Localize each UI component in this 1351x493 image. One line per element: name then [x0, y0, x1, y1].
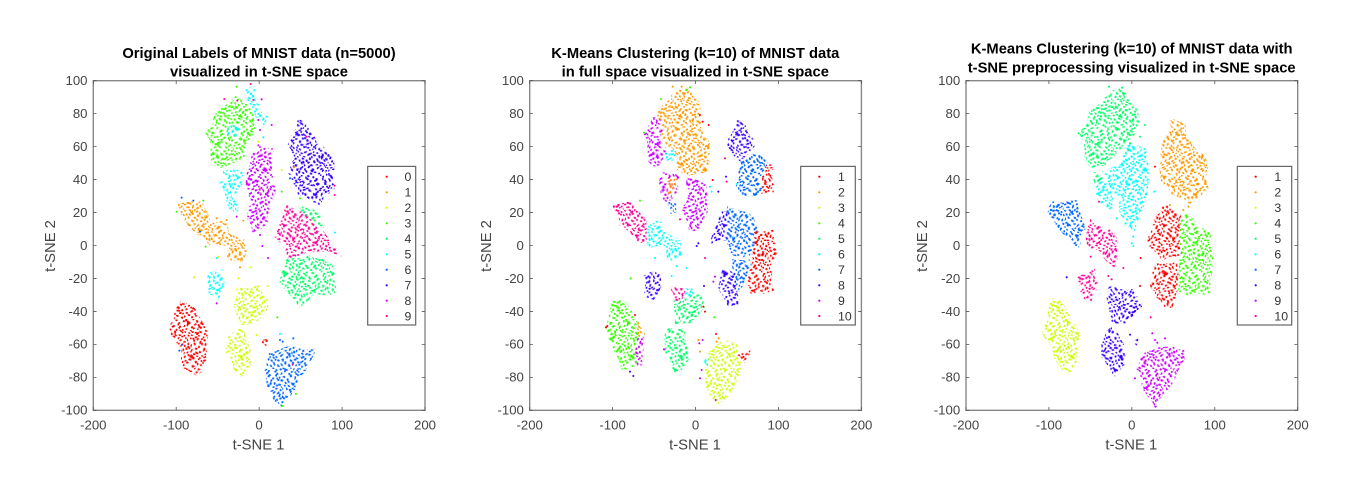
x tick labels: 0	[1128, 418, 1135, 432]
legend: clusters 1 to 10	[801, 166, 855, 325]
x tick labels	[953, 418, 1309, 432]
y tick labels: 20	[946, 205, 960, 220]
legend: clusters 1 to 10: 8	[838, 278, 845, 292]
y tick labels: 40	[73, 172, 88, 187]
panel: k-means with t-SNE preprocessing	[915, 42, 1309, 454]
y tick labels: 20	[509, 205, 524, 220]
y tick labels: -80	[941, 370, 960, 385]
legend: clusters 1 to 10: 10	[1274, 309, 1288, 323]
legend: digits 0 to 9: 5	[404, 248, 412, 262]
y tick labels: -100	[934, 403, 960, 418]
y tick labels: -80	[68, 370, 88, 385]
scatter plot: original labels	[168, 84, 342, 407]
y tick labels: 0	[80, 238, 88, 253]
y tick labels: 60	[73, 139, 88, 154]
scatter plot: k-means with t-SNE preprocessing	[1042, 85, 1215, 407]
y tick labels: -40	[505, 304, 524, 319]
x tick labels: 100	[331, 418, 353, 432]
legend: clusters 1 to 10: 3	[838, 201, 845, 215]
y tick labels	[61, 73, 88, 418]
legend: clusters 1 to 10: 4	[838, 216, 845, 230]
legend: digits 0 to 9	[368, 166, 416, 325]
y tick labels	[497, 73, 524, 418]
x tick labels	[516, 418, 872, 432]
x tick labels: 200	[1287, 418, 1309, 432]
y tick labels: 100	[65, 73, 88, 88]
legend: digits 0 to 9: 6	[404, 263, 412, 277]
x tick labels: 100	[1204, 418, 1226, 432]
x tick labels: 0	[692, 418, 699, 432]
axes frame and ticks: k-means in full space	[530, 81, 861, 410]
x axis label: t-SNE 1	[669, 438, 721, 454]
legend: clusters 1 to 10: 1	[1274, 170, 1281, 184]
axes frame and ticks: original labels	[93, 81, 425, 410]
y tick labels: -40	[68, 304, 88, 319]
legend: clusters 1 to 10: 1	[838, 170, 845, 184]
y tick labels	[934, 73, 960, 418]
legend: clusters 1 to 10: 6	[1274, 248, 1281, 262]
legend: digits 0 to 9: 9	[404, 309, 412, 323]
title: k-means in full space: K-Means Clustering (k=10) of MNIST data	[551, 46, 840, 62]
y tick labels: -20	[941, 271, 960, 286]
legend: clusters 1 to 10: 5	[1274, 232, 1281, 246]
y tick labels: -80	[505, 370, 524, 385]
y axis label: t-SNE 2	[43, 220, 59, 272]
x tick labels: 0	[255, 418, 263, 432]
legend: clusters 1 to 10: 10	[838, 309, 852, 323]
y tick labels: 20	[73, 205, 88, 220]
y tick labels: 80	[509, 106, 524, 121]
y tick labels: 80	[73, 106, 88, 121]
legend: clusters 1 to 10: 5	[838, 232, 845, 246]
y tick labels: 100	[938, 73, 960, 88]
title: k-means with t-SNE preprocessing: K-Means Clustering (k=10) of MNIST data with	[971, 42, 1293, 58]
panel: original labels	[43, 46, 436, 454]
legend: digits 0 to 9: 0	[404, 170, 412, 184]
y tick labels: 80	[946, 106, 960, 121]
x tick labels: -200	[516, 418, 543, 432]
x tick labels	[80, 418, 436, 432]
scatter plot: k-means in full space	[605, 85, 778, 407]
x tick labels: -200	[953, 418, 979, 432]
y tick labels: 100	[502, 73, 524, 88]
legend: clusters 1 to 10: 6	[838, 248, 845, 262]
legend: digits 0 to 9: 7	[404, 278, 412, 292]
x tick labels: -200	[80, 418, 107, 432]
x axis label: t-SNE 1	[1105, 438, 1157, 454]
axes frame and ticks: k-means with t-SNE preprocessing	[966, 81, 1298, 410]
y tick labels: -60	[68, 337, 88, 352]
y tick labels: -100	[497, 403, 524, 418]
panel: k-means in full space	[479, 46, 872, 454]
y tick labels: 40	[509, 172, 524, 187]
x tick labels: 200	[850, 418, 872, 432]
legend: clusters 1 to 10: 4	[1274, 216, 1281, 230]
legend: clusters 1 to 10: 2	[838, 186, 845, 200]
y tick labels: 0	[517, 238, 524, 253]
legend: clusters 1 to 10: 2	[1274, 186, 1281, 200]
y tick labels: -40	[941, 304, 960, 319]
title: k-means in full space: in full space visualized in t-SNE space	[562, 65, 829, 81]
title: original labels: Original Labels of MNIST data (n=5000)	[122, 46, 396, 62]
legend: digits 0 to 9: 4	[404, 232, 412, 246]
legend: clusters 1 to 10: 9	[1274, 294, 1281, 308]
x axis label: t-SNE 1	[233, 438, 284, 454]
legend: clusters 1 to 10: 8	[1274, 278, 1281, 292]
legend: clusters 1 to 10	[1237, 166, 1292, 325]
y tick labels: -100	[61, 403, 88, 418]
x tick labels: 200	[414, 418, 436, 432]
legend: digits 0 to 9: 2	[404, 201, 412, 215]
x tick labels: -100	[599, 418, 626, 432]
y tick labels: -60	[505, 337, 524, 352]
x tick labels: -100	[1036, 418, 1062, 432]
y axis label: t-SNE 2	[915, 220, 931, 272]
y tick labels: -20	[505, 271, 524, 286]
y tick labels: 60	[946, 139, 960, 154]
title: k-means with t-SNE preprocessing: t-SNE preprocessing visualized in t-SNE space	[968, 60, 1296, 76]
legend: clusters 1 to 10: 7	[838, 263, 845, 277]
title: original labels: visualized in t-SNE space	[170, 65, 348, 81]
y tick labels: 40	[946, 172, 960, 187]
y tick labels: -60	[941, 337, 960, 352]
x tick labels: 100	[767, 418, 790, 432]
legend: clusters 1 to 10: 3	[1274, 201, 1281, 215]
y tick labels: 0	[953, 238, 960, 253]
legend: digits 0 to 9: 8	[404, 294, 412, 308]
y tick labels: -20	[68, 271, 88, 286]
legend: clusters 1 to 10: 9	[838, 294, 845, 308]
y tick labels: 60	[509, 139, 524, 154]
y axis label: t-SNE 2	[479, 220, 495, 272]
legend: clusters 1 to 10: 7	[1274, 263, 1281, 277]
legend: digits 0 to 9: 3	[404, 216, 412, 230]
x tick labels: -100	[163, 418, 189, 432]
legend: digits 0 to 9: 1	[404, 186, 412, 200]
